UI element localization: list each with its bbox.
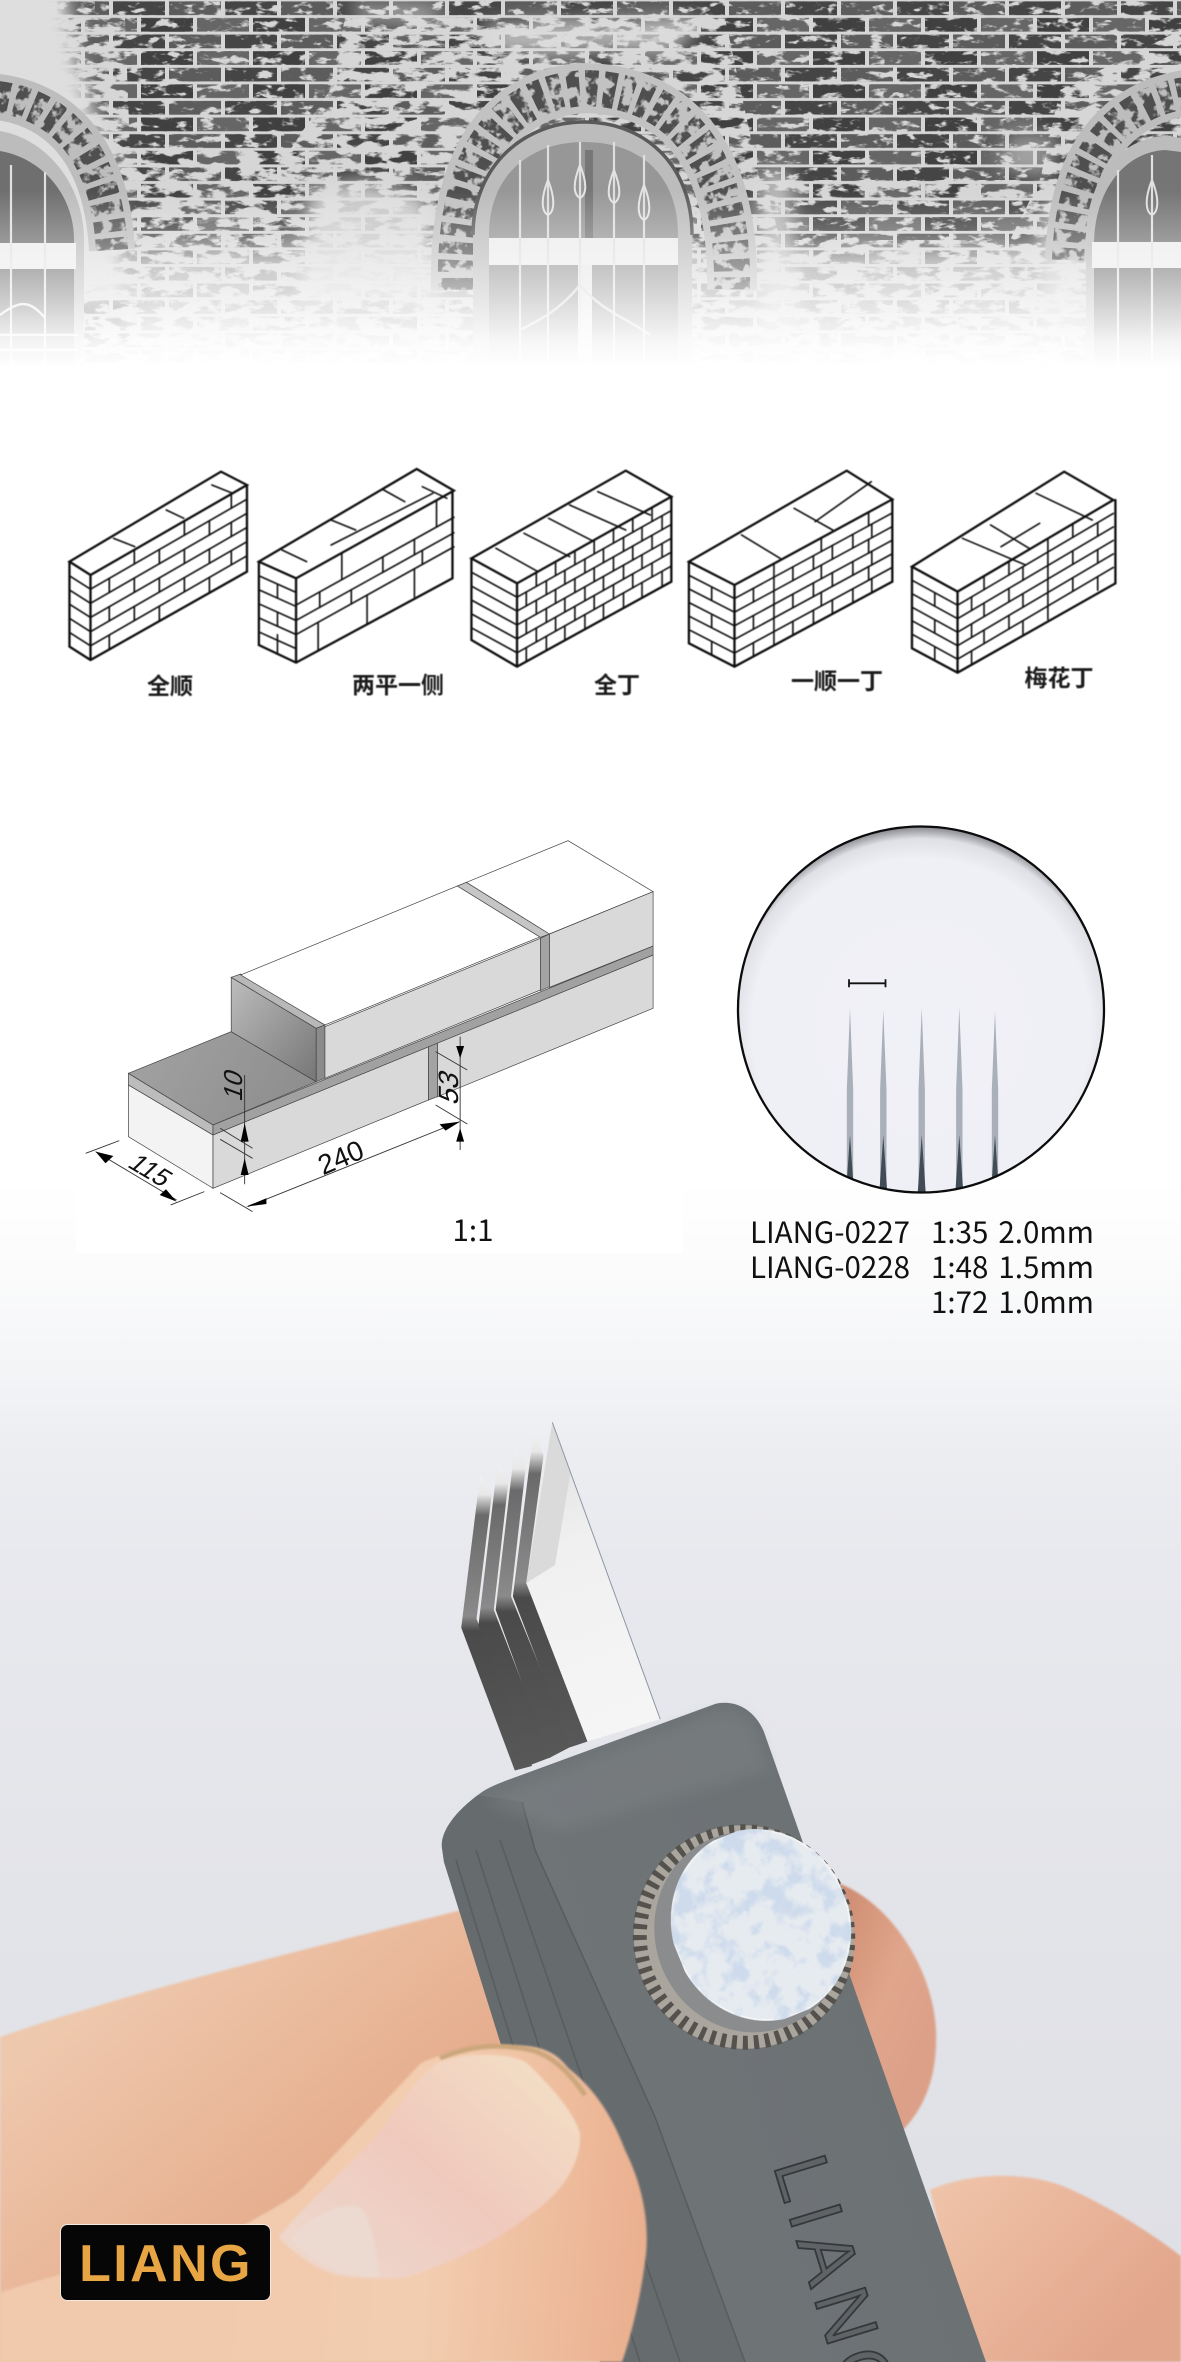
nail lunula [292,2206,380,2277]
central window [473,122,692,375]
LIANG logo badge: LIANG [79,2235,253,2293]
dimension lines and arrows [86,1037,467,1212]
spec row 1: 1:35 [931,1210,988,1252]
grip top highlight [482,1711,770,1830]
right window [1086,136,1181,372]
caption: 两平一侧: 两平一侧 [352,666,444,700]
spec row 2: LIANG-0228 [750,1245,910,1287]
wall: header bond 全丁 [471,471,671,667]
brick masonry [128,841,653,1188]
dimension: 10: 10 [219,1065,248,1104]
spec row 2: 1:48 [931,1245,988,1287]
spec row 3 [931,1280,1094,1322]
LIANG logo badge [60,2224,270,2300]
scale label 1:1: 1:1 [453,1208,493,1250]
brick bond diagrams [69,469,1115,673]
wall: stretcher bond 全顺 [69,472,247,660]
needle blade tips [846,1007,1000,1200]
photo: grey grip handle [442,1703,986,2362]
product specification table [750,1210,1094,1322]
caption: 一顺一丁: 一顺一丁 [791,662,883,696]
grip side facet [442,1795,745,2362]
caption: 全顺: 全顺 [147,667,193,701]
photo: index finger [0,1910,560,2362]
photo: middle finger behind tool [800,1878,936,2130]
wall: Flemish bond 梅花丁 [912,472,1115,673]
spec row 2 [750,1245,1094,1287]
spec row 3: 1:72 [931,1280,988,1322]
photo: ring finger lower right [930,2176,1181,2362]
spec row 1: 2.0mm [998,1210,1094,1252]
caption: 全丁: 全丁 [594,666,640,700]
wall: English bond 一顺一丁 [689,471,892,667]
thumbnail [279,2055,580,2278]
left window [0,130,84,372]
photo: thumb and nail [0,2046,647,2362]
photo: old brick wall with arched windows [0,0,1181,375]
spec row 1: LIANG-0227 [750,1210,910,1252]
scale bar [849,979,886,987]
rear blades [461,1429,588,1771]
isometric brick dimension drawing [86,841,653,1212]
caption: 梅花丁: 梅花丁 [1024,659,1094,693]
dimension: 115: 115 [122,1149,179,1192]
magnified circle: blade spacing [738,826,1104,1200]
white backing panel for brick drawing [76,800,683,1253]
photo: multi-blade stack [461,1422,660,1771]
wall: two flats one side 两平一侧 [259,469,454,663]
dimension: 53: 53 [434,1066,465,1108]
dimension: 240: 240 [313,1134,368,1181]
knurled thumb screw [602,1794,886,2080]
spec row 1 [750,1210,1094,1252]
diagram captions [147,659,1094,701]
spec row 3: 1.0mm [998,1280,1094,1322]
spec row 2: 1.5mm [998,1245,1094,1287]
front blade [526,1422,660,1741]
